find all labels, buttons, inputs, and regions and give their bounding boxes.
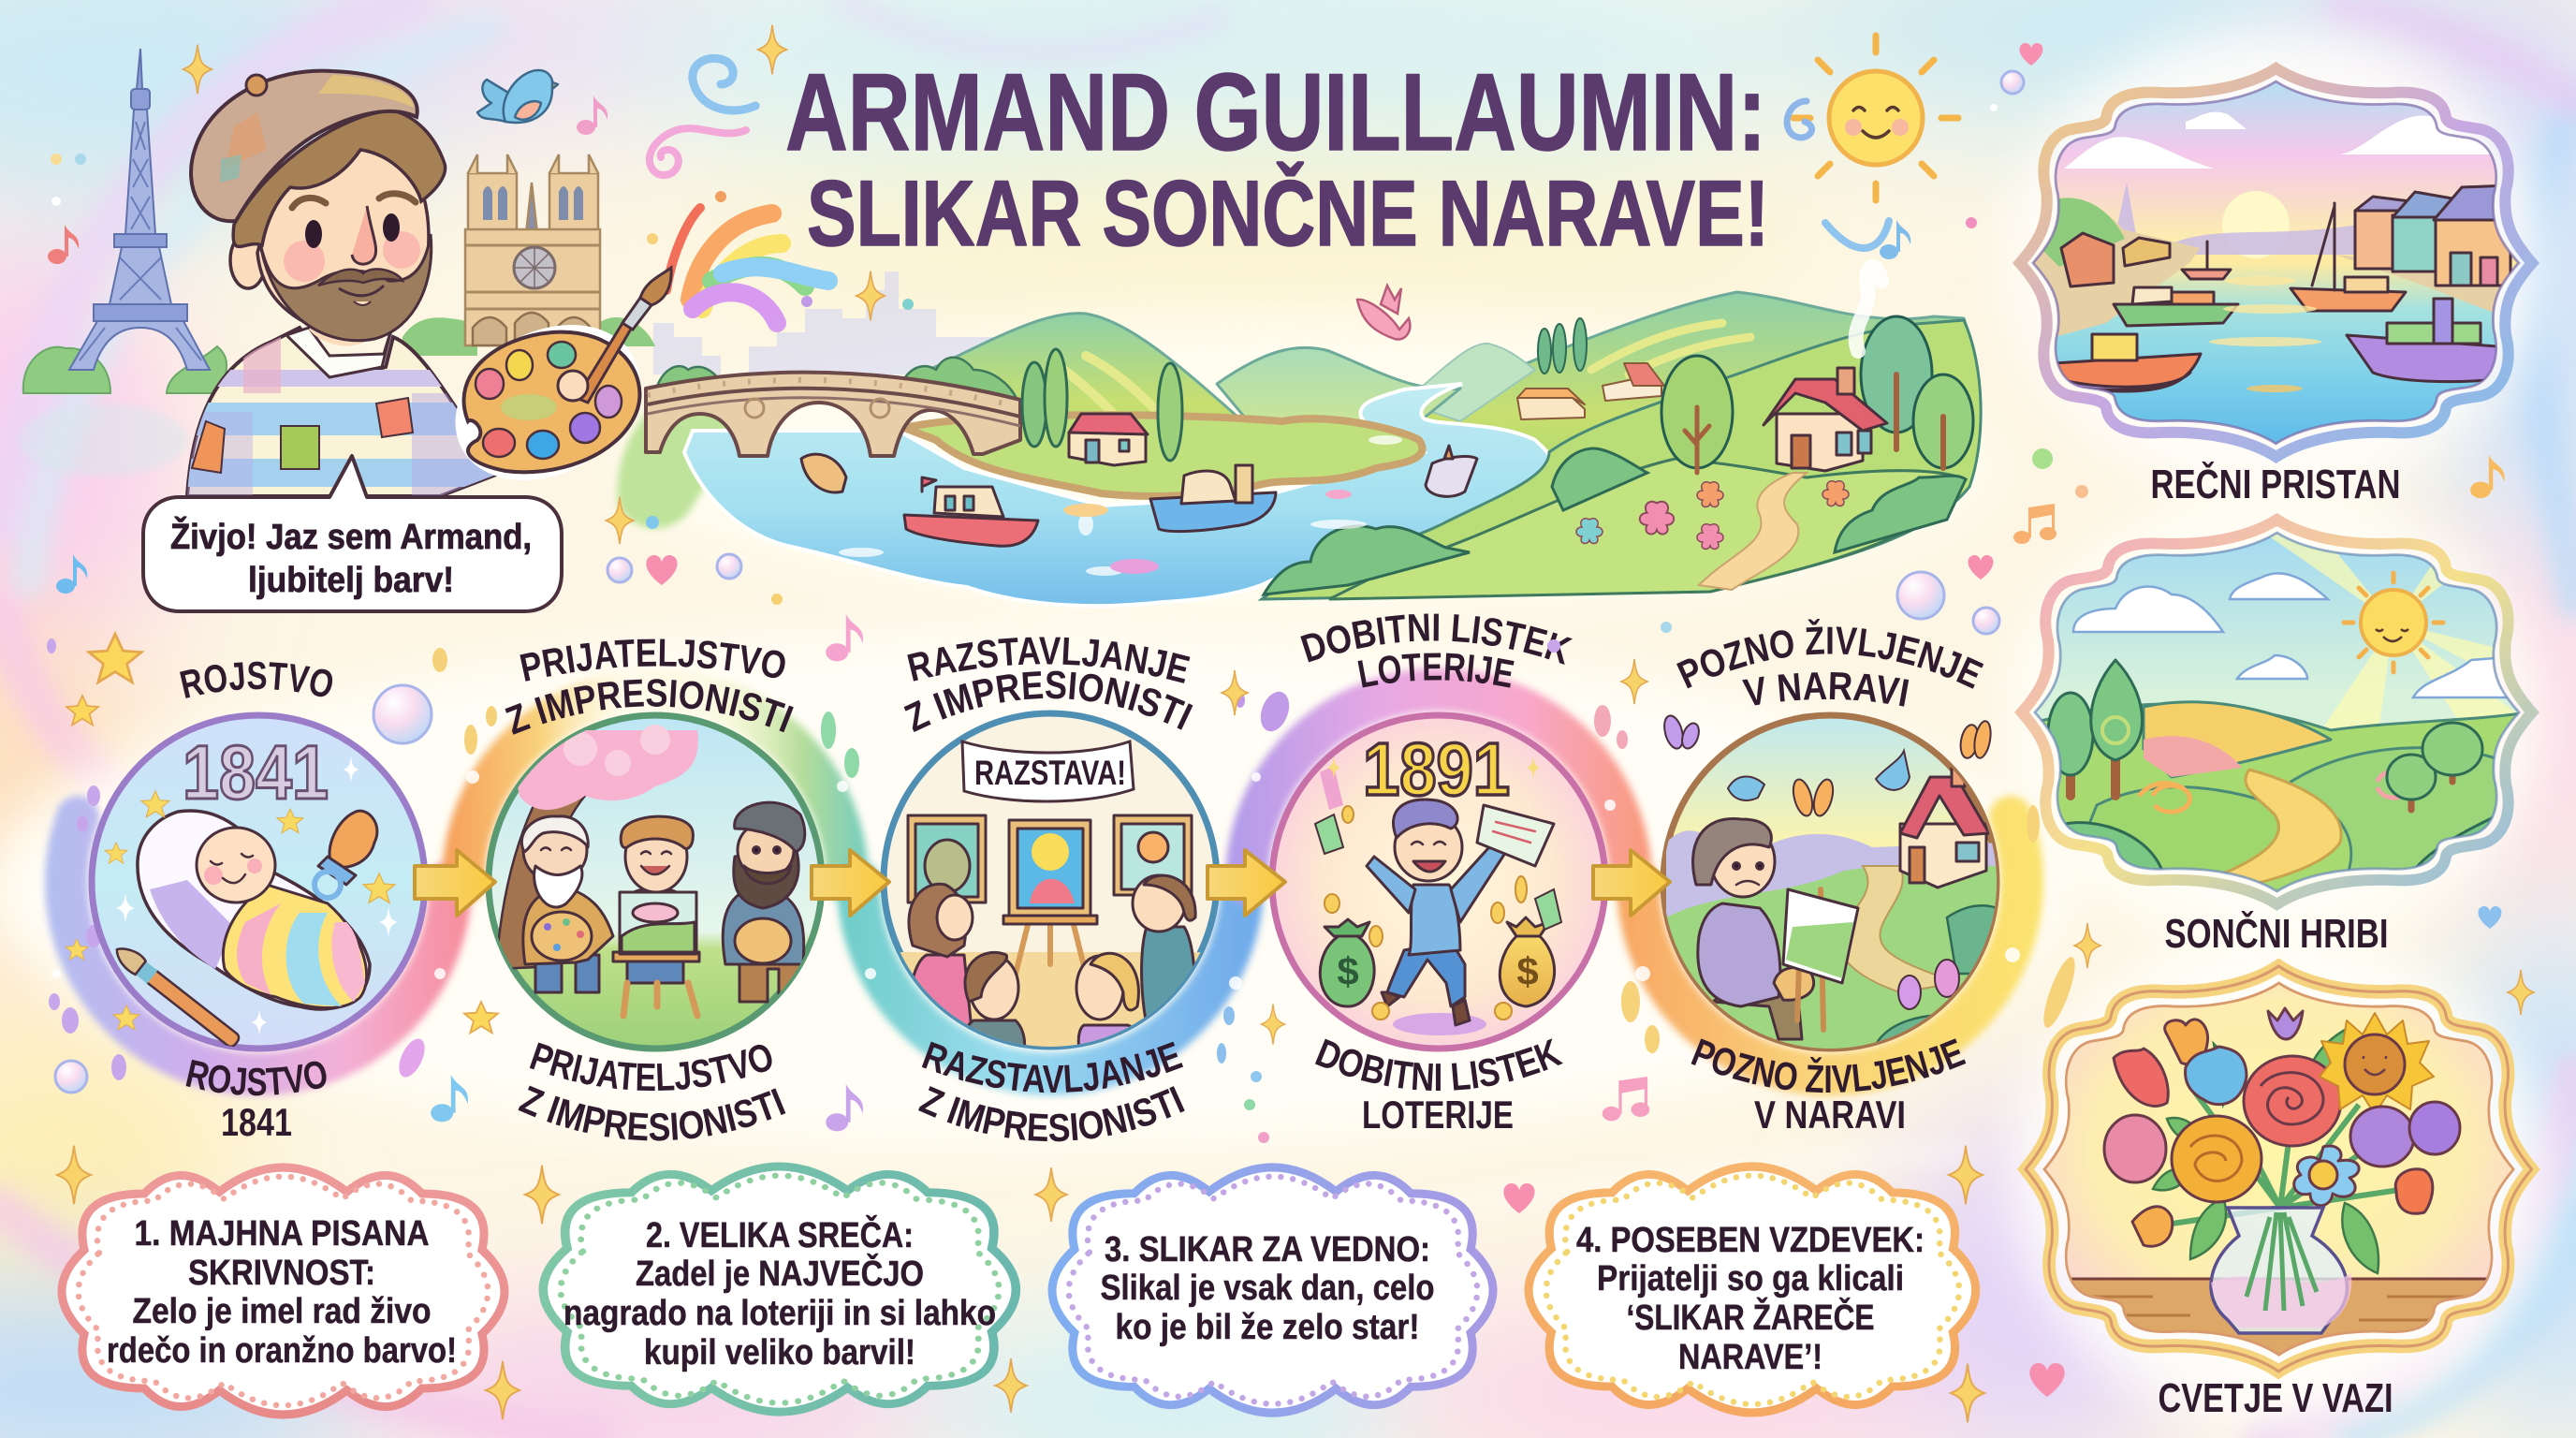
- circle 4: winning lottery ticket: $: [1337, 949, 1359, 993]
- houses: [2061, 185, 2510, 286]
- framed picture: flowers in a vase: [2026, 966, 2532, 1421]
- boats in harbour: [2054, 203, 2497, 391]
- labels below circles: DOBITNI LISTEK: [1310, 1030, 1567, 1099]
- old painter seated: [1693, 818, 1814, 1039]
- callout 1: secret: [62, 1167, 505, 1415]
- scattered stars: [66, 634, 498, 1033]
- callout 3: painter forever: 3. SLIKAR ZA VEDNO:: [1105, 1230, 1430, 1269]
- tulips and roses: [2104, 1008, 2460, 1246]
- circle 5: late life in nature: [1661, 713, 2012, 1058]
- year 1891: 1891: [1363, 727, 1510, 811]
- eyes and cheeks: [284, 194, 420, 282]
- framed picture: sunny hills: [2022, 520, 2532, 957]
- labels below circles: Z IMPRESIONISTI: [914, 1078, 1191, 1150]
- sweater patches: [192, 398, 413, 473]
- callout 2: great luck: nagrado na loteriji in si lahko: [564, 1294, 996, 1333]
- labels above circles: Z IMPRESIONISTI: [899, 663, 1199, 741]
- arrows between stages: [415, 850, 1670, 916]
- ribbon decorations: [47, 638, 2081, 1081]
- labels above circles: V NARAVI: [1740, 664, 1912, 715]
- label: flowers in vase: CVETJE V VAZI: [2159, 1375, 2393, 1421]
- face: [257, 150, 429, 337]
- big house with trees: [1661, 316, 1973, 473]
- labels above circles: ROJSTVO: [180, 661, 333, 698]
- exhibition banner: [962, 741, 1134, 801]
- pink bird: [1357, 286, 1410, 340]
- year 1841 in circle: 1841: [183, 730, 329, 815]
- wooden table: [2026, 1279, 2532, 1372]
- middle painter: [621, 816, 693, 983]
- ear: [230, 232, 266, 288]
- icon: Eiffel Tower: [19, 49, 227, 476]
- sweater: [178, 328, 515, 496]
- callout 4: special nickname: NARAVE’!: [1678, 1338, 1822, 1377]
- hills: [2022, 702, 2532, 904]
- hair: [233, 110, 446, 246]
- water sparkles: [839, 435, 1402, 576]
- bushes: [1264, 448, 1966, 594]
- bearded painter: [723, 802, 805, 1002]
- paintings on easels: [908, 815, 1192, 974]
- framed picture: river harbour: [2020, 68, 2532, 507]
- scattered bubbles: [55, 71, 2024, 1093]
- icon: Notre-Dame cathedral: [402, 154, 655, 356]
- callout 3: painter forever: [1052, 1167, 1493, 1413]
- cottage: [1900, 763, 1989, 888]
- labels below circles: RAZSTAVLJANJE: [917, 1033, 1187, 1101]
- bridge: [646, 373, 1020, 456]
- beret: [191, 71, 417, 221]
- island with bank: [904, 415, 1423, 496]
- callout 4: special nickname: [1529, 1167, 1976, 1413]
- timeline ribbon: flowing rings: [66, 690, 2022, 1074]
- icon: smiling sun: [1793, 36, 1958, 200]
- character: Armand the painter: [178, 71, 671, 511]
- labels below circles: POZNO ŽIVLJENJE: [1686, 1030, 1970, 1101]
- jumping man: [1367, 800, 1509, 1025]
- clouds: [2064, 112, 2509, 169]
- labels above circles: DOBITNI LISTEK: [1295, 605, 1576, 673]
- callout 4: special nickname: Prijatelji so ga klicali: [1597, 1259, 1904, 1299]
- music notes: [48, 95, 2505, 1131]
- baby bundle: [138, 811, 370, 1009]
- meadow flowers: [1576, 481, 1849, 549]
- lottery ticket: [1477, 805, 1554, 866]
- callout 4: special nickname: 4. POSEBEN VZDEVEK:: [1576, 1221, 1925, 1260]
- labels above circles: PRIJATELJSTVO: [520, 638, 785, 682]
- exhibition banner: RAZSTAVA!: [974, 754, 1126, 792]
- callout 2: great luck: kupil veliko barvil!: [644, 1333, 915, 1372]
- swirls around title: [650, 58, 1889, 248]
- visitors: [908, 875, 1195, 1058]
- clouds: [2073, 573, 2532, 697]
- leaves: [2153, 1030, 2378, 1273]
- flying money and coins: [1315, 766, 1561, 1020]
- painter with white beard: [521, 816, 613, 992]
- easel with painting: [613, 892, 699, 1016]
- label: sunny hills: SONČNI HRIBI: [2164, 909, 2389, 957]
- trees: [2048, 660, 2482, 810]
- title: ARMAND GUILLAUMIN:: [785, 51, 1766, 173]
- blossom tree: [496, 725, 698, 969]
- blue bird: [477, 70, 558, 123]
- circle 4: winning lottery ticket: [1272, 715, 1605, 1049]
- callout 1: secret: Zelo je imel rad živo: [133, 1292, 431, 1331]
- sun rays and sun: [2265, 534, 2527, 740]
- small confetti dots: [51, 104, 2088, 1143]
- meadow bushes: [2045, 805, 2532, 904]
- callout 2: great luck: Zadel je NAJVEČJO: [636, 1252, 924, 1294]
- labels above circles: RAZSTAVLJANJE: [903, 628, 1194, 692]
- glass vase: [2211, 1208, 2351, 1333]
- boats on the river: [801, 446, 1477, 546]
- river: [684, 384, 1552, 606]
- neck: [309, 309, 382, 346]
- label: river harbour: REČNI PRISTAN: [2151, 460, 2400, 507]
- chimney smoke: [1856, 267, 1881, 351]
- distant city skyline: [653, 271, 1002, 374]
- pacifier: [315, 811, 377, 898]
- labels above circles: LOTERIJE: [1354, 644, 1517, 697]
- callout 2: great luck: 2. VELIKA SREČA:: [646, 1213, 914, 1255]
- labels below circles: LOTERIJE: [1362, 1093, 1514, 1137]
- labels above circles: POZNO ŽIVLJENJE: [1671, 617, 1989, 697]
- flowers: [1898, 960, 1959, 1009]
- scattered hearts: [646, 43, 2501, 1397]
- labels above circles: Z IMPRESIONISTI: [505, 679, 794, 735]
- speech bubble: ljubitelj barv!: [248, 561, 454, 600]
- labels below circles: 1841: [221, 1100, 292, 1144]
- right bank meadow: [1262, 320, 1981, 599]
- rainbow paint splash: [666, 208, 828, 323]
- back hills: [617, 292, 1973, 528]
- circle 1: birth 1841: [66, 715, 425, 1050]
- trees and small village: [1022, 318, 1664, 465]
- money bags: [1320, 917, 1555, 1006]
- callout 2: great luck: [543, 1167, 1016, 1412]
- callout 3: painter forever: Slikal je vsak dan, celo: [1101, 1269, 1434, 1308]
- callout 1: secret: rdečo in oranžno barvo!: [107, 1331, 457, 1371]
- landscape: river valley: [617, 267, 2003, 618]
- circle 4: winning lottery ticket: $: [1516, 949, 1539, 993]
- title: [785, 51, 1769, 265]
- labels below circles: Z IMPRESIONISTI: [514, 1077, 791, 1149]
- callout 1: secret: SKRIVNOST:: [188, 1254, 375, 1293]
- beard: [259, 234, 432, 341]
- left quay: [2020, 208, 2200, 346]
- speech bubble: [143, 456, 562, 611]
- birds and butterflies: [1661, 713, 1993, 818]
- palette and brush: [428, 268, 671, 511]
- labels below circles: [173, 1030, 1970, 1150]
- stems: [2153, 1086, 2406, 1226]
- title: SLIKAR SONČNE NARAVE!: [807, 161, 1769, 265]
- right quay: [2335, 255, 2532, 328]
- callout 4: special nickname: ‘SLIKAR ŽAREČE: [1627, 1296, 1874, 1338]
- labels below circles: V NARAVI: [1754, 1093, 1906, 1137]
- circle 3: exhibiting with impressionists: [880, 713, 1217, 1058]
- speech bubble: Živjo! Jaz sem Armand,: [170, 516, 532, 557]
- labels below circles: ROJSTVO: [182, 1051, 332, 1104]
- labels below circles: PRIJATELJSTVO: [525, 1034, 779, 1099]
- circle 2: friendship with impressionists: [489, 715, 822, 1049]
- callout 1: secret: 1. MAJHNA PISANA: [135, 1214, 429, 1254]
- callout 3: painter forever: ko je bil že zelo star!: [1116, 1308, 1419, 1347]
- easel and canvas: [1783, 889, 1858, 1030]
- winding path: [1699, 473, 1807, 590]
- labels above circles: [173, 605, 1989, 742]
